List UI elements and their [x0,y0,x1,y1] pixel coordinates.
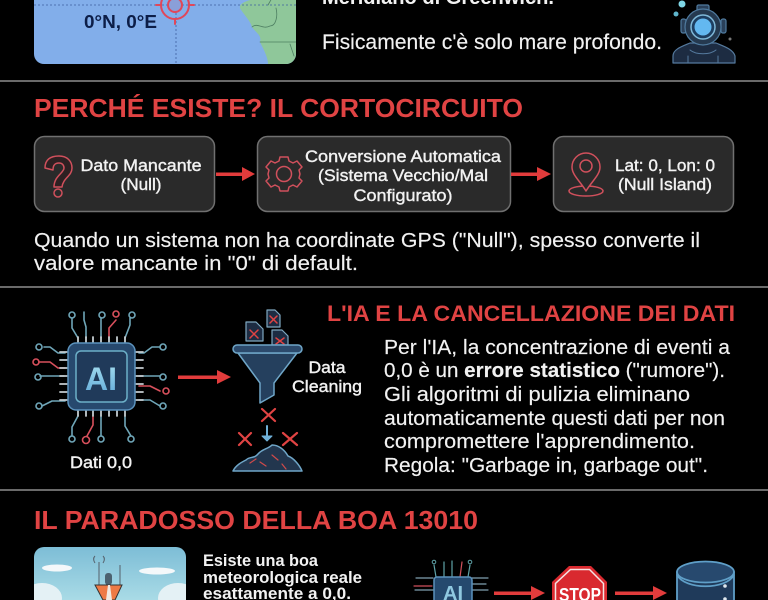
heading: IA: L'IA E LA CANCELLAZIONE DEI DATI [327,301,735,326]
arrow [178,370,231,384]
box: dato mancante: (Null) [120,175,162,194]
text: explanation: Quando un sistema non ha coordinate GPS ("Null"), spesso converte il [34,229,700,252]
box: dato mancante: Dato Mancante [80,156,202,175]
text: IA explanation: compromettere l'apprendimento. [384,430,695,453]
icon: small AI chip [414,560,488,600]
text: IA explanation: 0,0 è un errore statistico ("rumore"). [384,359,725,382]
divider [0,286,768,288]
arrow [615,586,667,600]
icon: database [677,562,734,600]
label: data cleaning: Data [308,359,346,377]
label: data cleaning [292,359,362,396]
box: dato mancante [34,136,214,212]
icon: target [156,0,194,24]
icon: question mark [45,156,72,197]
arrow [511,167,551,181]
arrow [216,167,255,181]
panel: flow diagram [34,136,734,212]
label: data cleaning: Cleaning [292,378,362,396]
icon: deep sea diver [673,0,735,63]
icon: AI chip [33,311,169,444]
text: IA explanation: Regola: "Garbage in, garbage out". [384,454,708,477]
text: IA explanation [384,336,731,477]
box: conversione automatica: Conversione Automatica [305,147,502,166]
icon: map pin [569,153,603,196]
heading: perché esiste: PERCHÉ ESISTE? IL CORTOCIRCUITO [34,93,523,123]
box: conversione automatica: (Sistema Vecchio/Mal [318,166,488,185]
text: IA explanation: Gli algoritmi di pulizia eliminano [384,383,690,406]
text: boa description [203,551,362,600]
pile of discarded data [233,445,302,471]
documents [246,310,288,345]
icon: stop sign [552,566,607,600]
text: boa description: Esiste una boa [203,551,319,570]
text: IA explanation: automaticamente questi dati per non [384,407,725,430]
illustration: weather buoy [34,547,186,600]
icon: data cleaning funnel [233,310,302,471]
text: explanation [34,229,700,275]
text: intro [322,0,662,54]
panel: map of Null Island [34,0,296,64]
text: boa description: meteorologica reale [203,568,362,587]
text: IA explanation: Per l'IA, la concentrazione di eventi a [384,336,731,359]
label: dati 0,0: Dati 0,0 [70,454,132,472]
map coordinates label: 0°N, 0°E [84,12,157,32]
heading: boa 13010: IL PARADOSSO DELLA BOA 13010 [34,505,478,535]
land: African coast [240,0,296,64]
icon: gear [266,157,302,191]
divider [0,489,768,491]
box: conversione automatica: Configurato) [354,186,452,205]
text: explanation: valore mancante in "0" di default. [34,252,358,275]
crosses and arrow [239,409,297,445]
box: lat lon: Lat: 0, Lon: 0 [615,156,715,175]
arrow [494,586,545,600]
box: lat lon: (Null Island) [618,175,712,194]
divider [0,80,768,82]
text: intro: Fisicamente c'è solo mare profondo. [322,31,662,54]
box: lat lon [554,136,734,212]
icon: AI chip: AI [85,361,117,397]
box: conversione automatica [258,136,510,212]
